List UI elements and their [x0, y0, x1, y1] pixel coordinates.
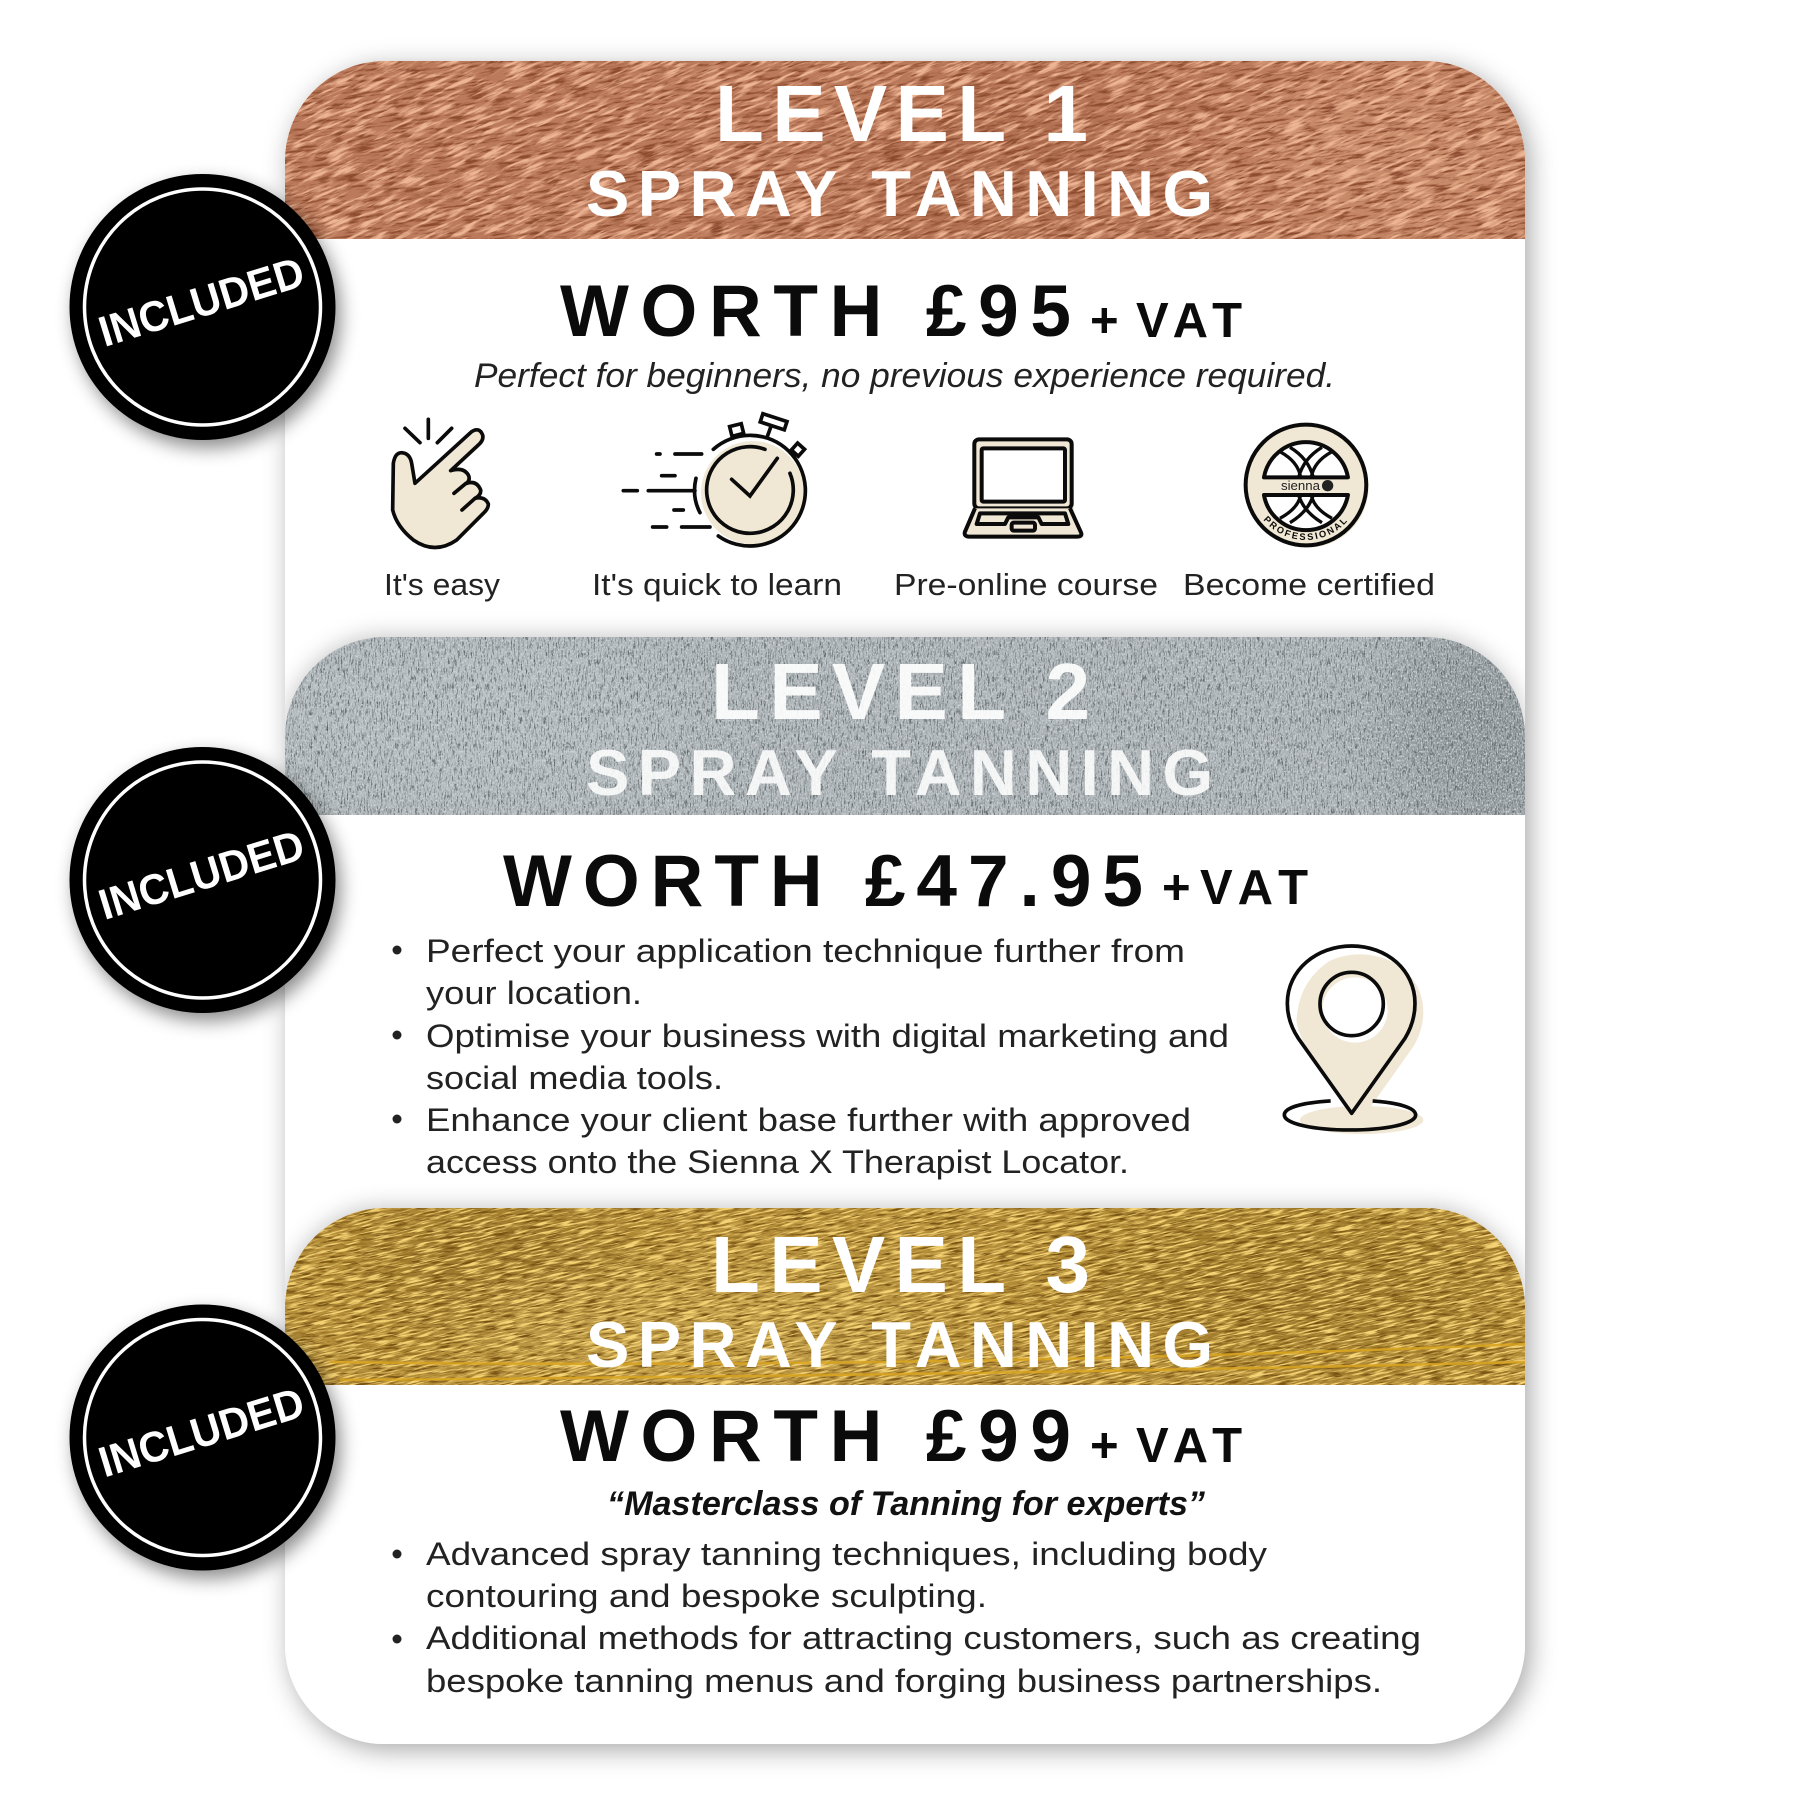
- panel: level 3: [285, 1195, 1525, 1698]
- level 3 bullet list: [392, 1536, 1421, 1699]
- badge: included level 1: [70, 174, 336, 440]
- level 2 silver banner: [285, 637, 1525, 815]
- card outline and shadow: [285, 61, 1525, 1744]
- level 3 bullet list: Advanced spray tanning techniques, including body: [426, 1536, 1267, 1572]
- icon: sienna professional badge: sienna: [1281, 479, 1321, 493]
- level 2 price: WORTH £47.95: [503, 841, 1143, 922]
- level 2 VAT: VAT: [1200, 861, 1308, 915]
- icon: sienna professional badge: [1244, 422, 1369, 548]
- level 3 VAT: VAT: [1136, 1419, 1242, 1473]
- level 2 bullet list: your location.: [426, 975, 642, 1011]
- level 3 tagline: “Masterclass of Tanning for experts”: [607, 1485, 1205, 1523]
- level 3 bullet list: Additional methods for attracting customers, such as creating: [426, 1620, 1421, 1656]
- level 2 plus: +: [1162, 861, 1191, 915]
- icon: sienna professional badge: PROFESSIONAL: [1264, 516, 1348, 540]
- panel: level 2: [285, 624, 1525, 1180]
- badge: included level 3: [70, 1304, 336, 1570]
- level 2 bullet list: Perfect your application technique further from: [426, 933, 1185, 969]
- level 2 subtitle: SPRAY TANNING: [586, 736, 1213, 809]
- label: become certified: Become certified: [1183, 567, 1435, 602]
- badge: included level 1: INCLUDED: [93, 248, 310, 357]
- level 2 bullet list: access onto the Sienna X Therapist Locator.: [426, 1144, 1129, 1180]
- level 1 tagline: Perfect for beginners, no previous experience required.: [474, 357, 1335, 395]
- level 2 bullet list: [392, 933, 1229, 1180]
- panel: level 1: [82, 61, 1525, 602]
- level 3 bullet list: contouring and bespoke sculpting.: [426, 1578, 987, 1614]
- badge: included level 2: INCLUDED: [93, 821, 310, 930]
- level 1 copper banner: [285, 61, 1525, 239]
- label: quick to learn: It's quick to learn: [592, 567, 842, 602]
- badge: included level 2: [70, 747, 336, 1013]
- level 2 card body: [285, 624, 1525, 728]
- level 1 title: LEVEL 1: [715, 69, 1088, 158]
- level 3 bullet list: bespoke tanning menus and forging business partnerships.: [426, 1663, 1382, 1699]
- label: easy: It's easy: [384, 567, 501, 602]
- level 3 title: LEVEL 3: [711, 1220, 1090, 1309]
- level 3 subtitle: SPRAY TANNING: [586, 1308, 1213, 1381]
- level 1 VAT: VAT: [1136, 294, 1242, 348]
- badge: included level 3: INCLUDED: [93, 1379, 310, 1487]
- level 3 plus: +: [1090, 1419, 1119, 1473]
- level 3 card body: [285, 1195, 1525, 1300]
- icon: stopwatch: [623, 414, 805, 546]
- level 2 bullet list: social media tools.: [426, 1060, 723, 1096]
- level 2 bullet list: Enhance your client base further with approved: [426, 1102, 1191, 1138]
- level 1 subtitle: SPRAY TANNING: [586, 157, 1213, 230]
- icon: laptop: [965, 439, 1083, 539]
- icon: snapping fingers: [393, 419, 490, 549]
- level 1 plus: +: [1090, 294, 1119, 348]
- icon: location pin: [1284, 946, 1423, 1134]
- level 3 price: WORTH £99: [560, 1396, 1071, 1477]
- level 3 gold banner: [285, 1208, 1525, 1385]
- level 2 title: LEVEL 2: [711, 647, 1090, 736]
- level 1 price: WORTH £95: [560, 271, 1071, 352]
- label: pre-online course: Pre-online course: [894, 567, 1158, 602]
- level 2 bullet list: Optimise your business with digital marketing and: [426, 1018, 1229, 1054]
